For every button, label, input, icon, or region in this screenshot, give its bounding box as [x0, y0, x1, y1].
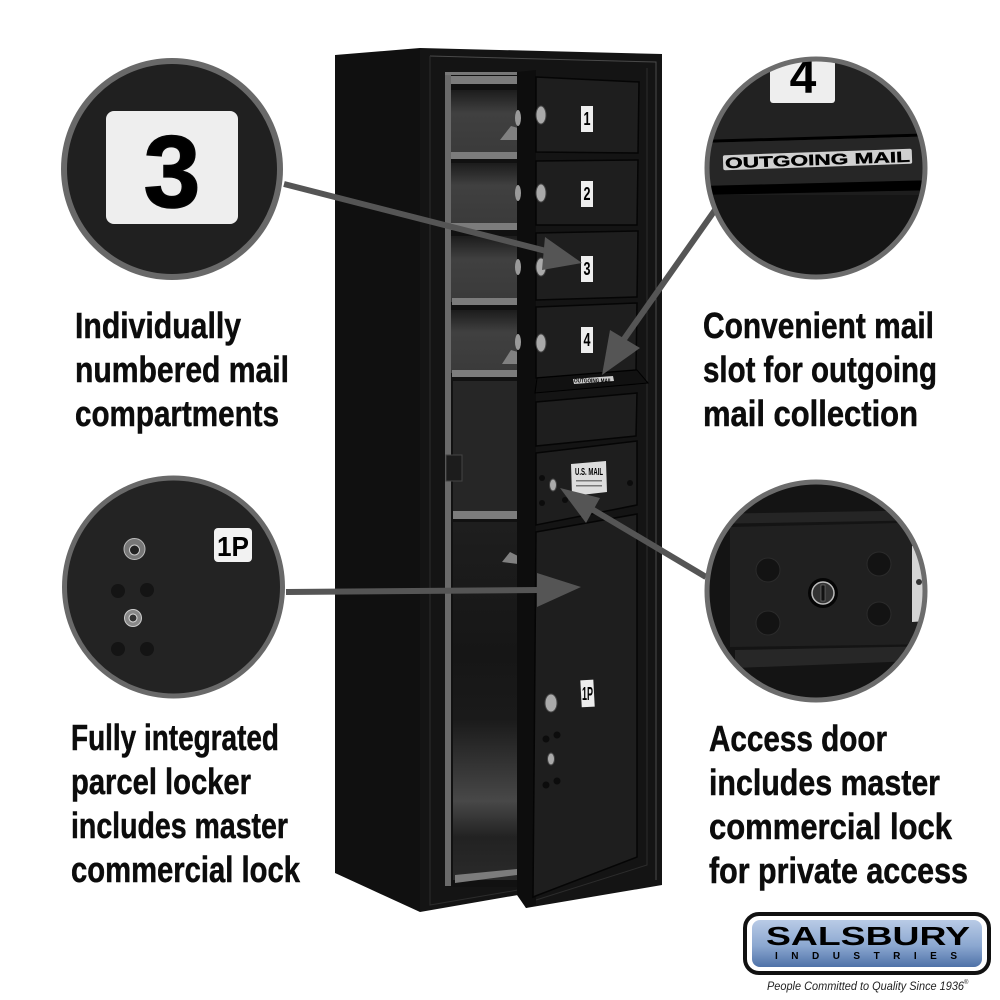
caption: numbered compartments [75, 305, 289, 434]
Salsbury logo: INDUSTRIES [775, 951, 957, 962]
cabinet front frame [420, 48, 662, 912]
glass edge [445, 72, 451, 886]
caption: outgoing mail slot [703, 305, 937, 434]
Salsbury logo: SALSBURY [766, 921, 970, 951]
callout circle: parcel locks [64, 478, 282, 696]
arrow: access door [560, 488, 706, 577]
opened door hinge edge [517, 70, 536, 908]
outgoing mail plate [723, 149, 912, 172]
caption: parcel locker [71, 717, 301, 890]
mailbox cabinet [335, 48, 662, 912]
open interior [445, 72, 518, 887]
callout circle: outgoing mail [704, 56, 928, 280]
caption: parcel locker: commercial lock [71, 849, 301, 890]
caption: parcel locker: Fully integrated [71, 717, 279, 758]
outgoing mail flap [535, 370, 648, 393]
caption: outgoing mail slot: Convenient mail [703, 305, 934, 346]
caption: access door: includes master [709, 762, 940, 803]
caption: outgoing mail slot: slot for outgoing [703, 349, 937, 390]
latches [500, 126, 518, 564]
compartment number labels [580, 106, 595, 707]
compartment number labels: 1P [582, 684, 593, 704]
caption: access door: Access door [709, 718, 887, 759]
outgoing mail label [573, 376, 614, 384]
logo tagline: People Committed to Quality Since 1936 [767, 979, 964, 993]
compartment number labels: 1 [584, 109, 590, 129]
compartment number labels: 4 [584, 330, 590, 350]
shelves [451, 76, 518, 883]
compartment number labels: 2 [584, 184, 590, 204]
callout circle: number 3 [64, 61, 280, 277]
outgoing mail plate: OUTGOING MAIL [725, 149, 910, 172]
caption: outgoing mail slot: mail collection [703, 393, 918, 434]
callout circle: access door lock [700, 482, 940, 700]
cabinet side panel [335, 48, 420, 912]
callout circle: parcel locks: 1P [217, 531, 249, 562]
compartment doors [533, 77, 639, 897]
compartment number labels: 3 [584, 259, 590, 279]
caption: numbered compartments: numbered mail [75, 349, 289, 390]
U.S. Mail label: U.S. MAIL [575, 467, 603, 478]
arrow: outgoing slot [602, 210, 715, 375]
caption: numbered compartments: Individually [75, 305, 241, 346]
Salsbury logo: ® [964, 979, 969, 986]
callout circle: outgoing mail: 4 [790, 51, 817, 104]
caption: numbered compartments: compartments [75, 393, 279, 434]
U.S. Mail label [571, 461, 607, 496]
callout circle: number 3: 3 [144, 115, 200, 229]
caption: parcel locker: includes master [71, 805, 288, 846]
caption: access door [709, 718, 968, 891]
caption: parcel locker: parcel locker [71, 761, 251, 802]
caption: access door: commercial lock [709, 806, 953, 847]
door latch [446, 455, 462, 481]
arrow: parcel locker [286, 573, 581, 607]
Salsbury logo [745, 914, 989, 993]
compartment locks [536, 106, 557, 765]
outgoing mail label: OUTGOING MAIL [574, 378, 612, 384]
door bolts [539, 475, 633, 788]
arrow: compartments [284, 184, 582, 270]
